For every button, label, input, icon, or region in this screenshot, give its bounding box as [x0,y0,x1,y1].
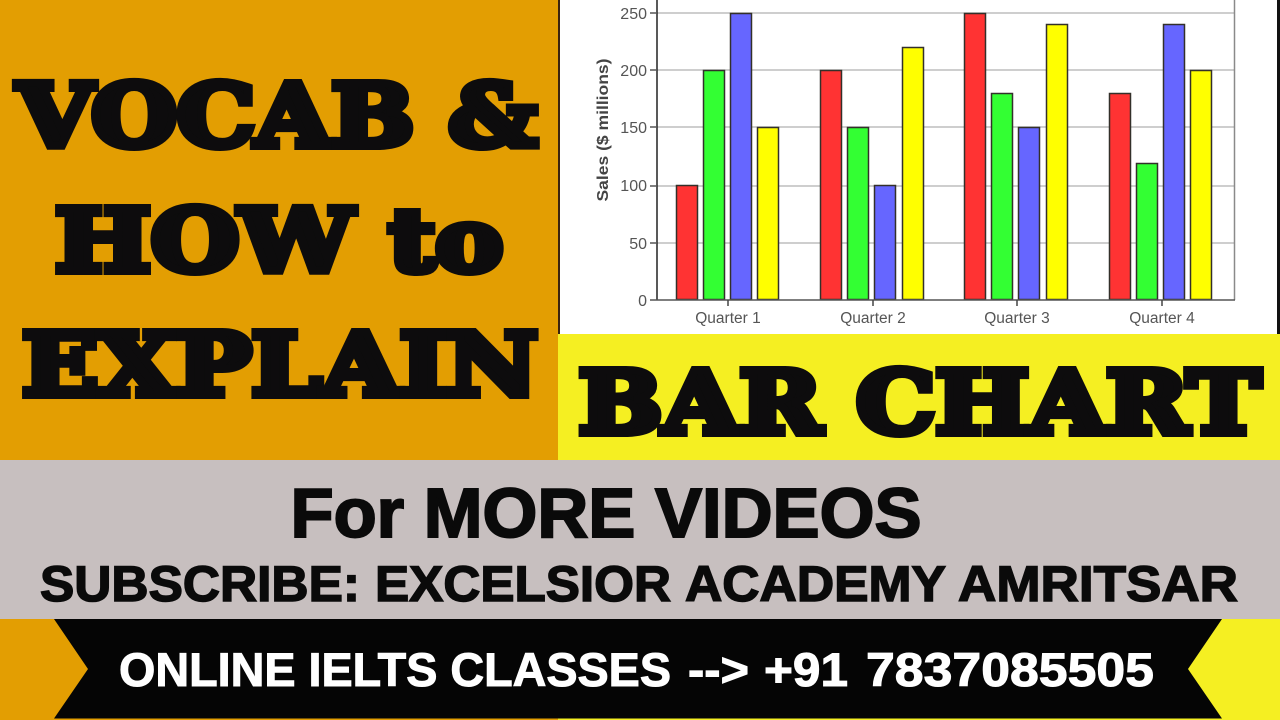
heading: vocab and how to explain [16,66,538,416]
text: online ielts classes [119,643,1154,696]
y axis labels: 250 [620,6,647,23]
strip right background [558,619,1280,720]
text: subscribe line: ACADEMY [685,556,946,612]
text: subscribe line: AMRITSAR [958,556,1238,612]
panel: bottom contact strip [0,619,1280,720]
black ribbon [54,619,1222,718]
y axis labels: 100 [620,178,647,195]
y axis labels: 200 [620,63,647,80]
panel: bar chart image [558,0,1280,334]
text: subscribe line [40,556,1238,612]
strip left background [0,619,558,720]
text: online ielts classes: --> [688,643,749,696]
chart bars [676,14,1212,300]
y axis title: Sales ($ millions) [595,58,612,202]
x axis labels [695,310,1195,327]
text: for more videos: For MORE VIDEOS [290,474,922,552]
panel: grey subscribe band [0,460,1280,619]
chart plot frame and gridlines [657,0,1234,300]
heading: vocab and how to explain: VOCAB & [16,66,537,167]
text: online ielts classes: ONLINE IELTS CLASSES [119,643,671,696]
x axis labels: Quarter 1 [695,310,761,327]
heading: vocab and how to explain: EXPLAIN [22,315,538,416]
panel: yellow bar chart label [558,334,1280,460]
text: online ielts classes: 7837085505 [866,643,1154,696]
text: subscribe line: EXCELSIOR [375,556,671,612]
heading: vocab and how to explain: HOW to [55,191,503,292]
chart axes [650,0,1235,306]
y axis labels: 0 [638,293,647,310]
text: subscribe line: SUBSCRIBE: [40,556,360,612]
x axis labels: Quarter 3 [984,310,1050,327]
x axis labels: Quarter 2 [840,310,906,327]
text: online ielts classes: +91 [764,643,848,696]
y axis labels [620,6,647,310]
panel: orange title panel [0,0,558,460]
heading: bar chart: BAR CHART [578,353,1260,454]
y axis labels: 50 [629,236,647,253]
y axis labels: 150 [620,120,647,137]
x axis labels: Quarter 4 [1129,310,1195,327]
